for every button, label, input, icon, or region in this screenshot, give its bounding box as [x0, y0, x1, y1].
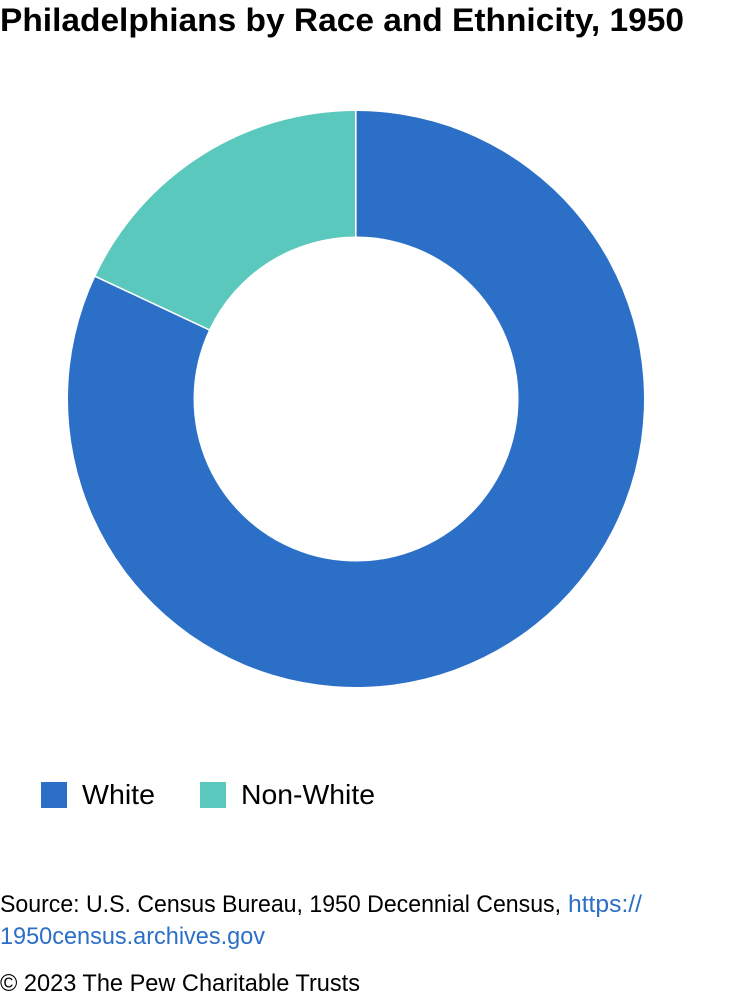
donut chart	[68, 110, 644, 687]
source link, second line: 1950census.archives.gov	[0, 923, 265, 950]
legend swatch: White	[41, 782, 67, 808]
source text: Source: U.S. Census Bureau, 1950 Decennial Census,	[0, 891, 561, 918]
segment: White	[68, 111, 644, 687]
legend swatch: Non-White	[200, 782, 226, 808]
source note	[0, 891, 642, 950]
legend label: White: White	[82, 779, 155, 810]
legend label: Non-White: Non-White	[241, 779, 375, 810]
copyright: © 2023 The Pew Charitable Trusts	[0, 970, 360, 997]
segment separators	[94, 110, 356, 330]
segment: Non-White	[95, 111, 356, 330]
legend	[41, 779, 375, 810]
source link, first line: https://	[568, 891, 642, 918]
title: Philadelphians by Race and Ethnicity, 1950	[0, 2, 684, 38]
